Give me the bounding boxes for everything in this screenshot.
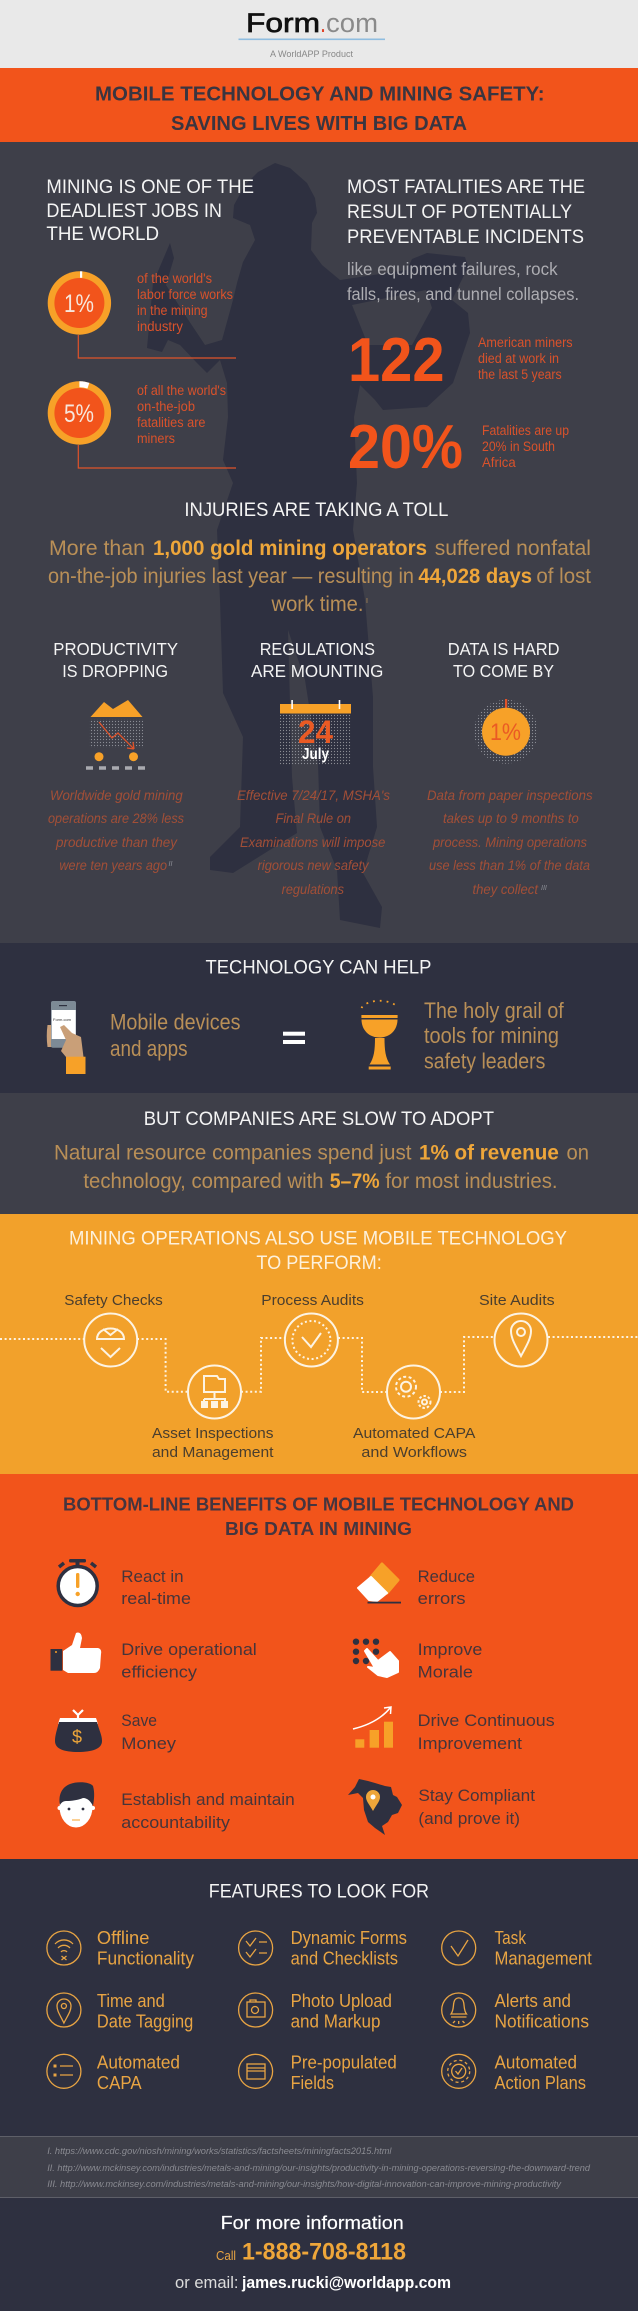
benefit: reduce errors	[358, 1564, 475, 1608]
panel: features to look for	[0, 1859, 638, 2311]
tagline: A WorldAPP Product	[270, 49, 353, 60]
text: adoption paragraph: Natural resource companies spend just	[54, 1141, 412, 1164]
panel: mobile technology uses	[0, 1214, 638, 1474]
heading: preventable incidents: PREVENTABLE INCIDENTS	[347, 227, 584, 248]
feature: automated action plans	[442, 2052, 586, 2093]
icon: hand holding phone	[47, 1001, 86, 1074]
feature: photo upload	[239, 1991, 392, 2031]
panel: bottom-line benefits: BIG DATA IN MINING	[225, 1518, 412, 1539]
panel: technology can help: TECHNOLOGY CAN HELP	[206, 958, 431, 979]
benefit: react in real-time: React in	[121, 1567, 184, 1586]
text: mobile devices	[110, 1009, 240, 1061]
feature: photo upload: and Markup	[291, 2011, 380, 2031]
text: fatalities: on-the-job	[137, 399, 195, 414]
text: injuries paragraph: I	[366, 598, 368, 605]
column: data	[427, 639, 593, 897]
text: data detail: Data from paper inspections	[427, 787, 593, 803]
heading: injuries: INJURIES ARE TAKING A TOLL	[184, 500, 448, 521]
text: injuries paragraph: More than	[49, 537, 145, 560]
sources band: I. https://www.cdc.gov/niosh/mining/works/statistics/factsheets/miningfacts2015.html	[47, 2146, 392, 2157]
stat: 122	[348, 326, 573, 395]
feature: task management: Management	[494, 1948, 592, 1968]
text: injuries paragraph: suffered nonfatal	[435, 537, 591, 560]
benefit: stay compliant	[348, 1779, 535, 1835]
text: holy grail: tools for mining	[424, 1023, 559, 1048]
text: data detail: III	[541, 885, 547, 892]
text: data detail: they collect	[472, 881, 539, 897]
feature: task management	[442, 1928, 592, 1968]
benefit: stay compliant: (and prove it)	[418, 1809, 520, 1828]
stat: 20%: 20% in South	[482, 439, 555, 454]
contact footer: For more information	[221, 2212, 404, 2233]
panel: technology can help	[0, 943, 638, 1093]
icon: calendar	[280, 700, 351, 765]
text: regulations detail: Final Rule on	[276, 810, 351, 826]
text: injuries paragraph: 44,028 days	[418, 565, 532, 588]
text: data detail: takes up to 9 months to	[443, 810, 579, 826]
step: site audits: Site Audits	[479, 1292, 555, 1309]
text: injuries paragraph: work time.	[271, 593, 364, 616]
text: holy grail: The holy grail of	[424, 998, 564, 1023]
benefit: operational efficiency: efficiency	[121, 1662, 198, 1681]
feature: dynamic forms: and Checklists	[291, 1948, 398, 1968]
feature: automated action plans: Automated	[494, 2052, 577, 2072]
text: holy grail	[424, 998, 564, 1074]
text: productivity detail: Worldwide gold mining	[50, 787, 183, 803]
column: productivity: IS DROPPING	[62, 661, 168, 681]
logo: Form.com: com	[326, 8, 378, 38]
benefit: continuous improvement: Improvement	[418, 1734, 522, 1753]
step: process audits: Process Audits	[261, 1292, 364, 1309]
step: automated CAPA: and Workflows	[361, 1444, 467, 1461]
column: regulations: REGULATIONS	[260, 639, 375, 659]
column: productivity	[48, 639, 184, 873]
contact footer: or email:	[175, 2273, 238, 2292]
stat: 20%: Africa	[482, 455, 516, 470]
icon: mine cart with falling chart	[86, 700, 146, 768]
sources band: III. http://www.mckinsey.com/industries/metals-and-mining/our-insights/how-digital-innovation-can-improve-mining-productivity	[47, 2179, 562, 2190]
column: regulations	[237, 639, 390, 897]
feature: pre-populated fields: Pre-populated	[291, 2052, 397, 2072]
benefit: operational efficiency: Drive operational	[121, 1640, 257, 1659]
text: regulations detail: regulations	[282, 881, 344, 897]
step: automated CAPA: Automated CAPA	[353, 1425, 475, 1442]
benefit: improve morale: Improve	[418, 1640, 482, 1659]
feature: pre-populated fields: Fields	[291, 2073, 334, 2093]
title banner: SAVING LIVES WITH BIG DATA	[171, 112, 467, 135]
logo: Form.com: Form	[246, 8, 320, 38]
panel: bottom-line benefits: BOTTOM-LINE BENEFITS OF MOBILE TECHNOLOGY AND	[63, 1494, 574, 1515]
benefit: save money: Save	[121, 1711, 157, 1730]
heading: preventable incidents: MOST FATALITIES ARE THE	[347, 177, 585, 198]
stat: 122: died at work in	[478, 351, 559, 366]
panel: bottom-line benefits	[0, 1474, 638, 1859]
text: adoption paragraph	[54, 1141, 589, 1193]
miner silhouette background	[147, 163, 470, 928]
text: data detail	[427, 787, 593, 897]
benefit: continuous improvement: Drive Continuous	[418, 1711, 555, 1730]
benefit: improve morale	[353, 1638, 482, 1681]
contact footer: Call	[216, 2248, 236, 2263]
donut: 5%	[48, 381, 236, 468]
feature: automated action plans: Action Plans	[494, 2073, 586, 2093]
contact footer	[175, 2212, 451, 2292]
text: productivity detail: operations are 28% less	[48, 810, 184, 826]
text: adoption paragraph: 5–7%	[330, 1170, 380, 1193]
panel: mobile technology uses: MINING OPERATIONS ALSO USE MOBILE TECHNOLOGY	[69, 1229, 567, 1250]
icon: equals sign	[283, 1032, 305, 1044]
benefit: reduce errors: Reduce	[418, 1567, 475, 1586]
feature: offline functionality: Functionality	[97, 1948, 194, 1968]
logo: Form.com	[238, 8, 385, 40]
column: data: DATA IS HARD	[448, 639, 560, 659]
stat: 122: American miners	[478, 335, 573, 350]
step: site audits	[479, 1292, 555, 1366]
text: regulations detail: Examinations will impose	[240, 834, 386, 850]
text: injuries paragraph: on-the-job injuries last year — resulting in	[48, 565, 414, 588]
text: labor force: of the world's	[137, 271, 212, 286]
donut: 1%: 1%	[64, 290, 94, 318]
panel: slow to adopt: BUT COMPANIES ARE SLOW TO ADOPT	[144, 1109, 494, 1130]
icon: holy grail	[361, 1001, 398, 1070]
benefit: operational efficiency	[50, 1633, 257, 1681]
text: productivity detail: II	[168, 861, 172, 868]
benefit: reduce errors: errors	[418, 1589, 466, 1608]
text: labor force: industry	[137, 319, 183, 334]
feature: offline functionality	[47, 1928, 194, 1968]
benefit: accountability	[58, 1782, 295, 1832]
text: regulations detail: rigorous new safety	[258, 857, 370, 873]
column: data: TO COME BY	[453, 661, 554, 681]
icon: calendar: 24	[298, 714, 333, 750]
text: regulations detail	[237, 787, 390, 897]
heading: deadliest jobs: MINING IS ONE OF THE	[46, 177, 254, 198]
feature: alerts: Alerts and	[494, 1991, 571, 2011]
benefit: accountability: accountability	[121, 1813, 231, 1832]
icon: 1% data drop: 1%	[490, 719, 521, 746]
donut: 1%	[48, 271, 236, 358]
feature: automated CAPA: CAPA	[97, 2073, 142, 2093]
title banner: MOBILE TECHNOLOGY AND MINING SAFETY:	[95, 83, 545, 106]
icon: hand holding phone: Form.com	[53, 1017, 72, 1022]
text: mobile devices: and apps	[110, 1036, 188, 1061]
text: incident types: falls, fires, and tunnel collapses.	[347, 284, 579, 304]
text: data detail: process. Mining operations	[432, 834, 587, 850]
benefit: react in real-time: real-time	[121, 1589, 191, 1608]
text: productivity detail: productive than they	[55, 834, 178, 850]
benefit: react in real-time	[58, 1559, 191, 1608]
text: incident types: like equipment failures, rock	[347, 259, 558, 279]
step: asset inspections: and Management	[152, 1444, 274, 1461]
feature: automated CAPA: Automated	[97, 2052, 180, 2072]
panel: mobile technology uses: TO PERFORM:	[256, 1253, 382, 1274]
stat: 20%: Fatalities are up	[482, 423, 569, 438]
feature: photo upload: Photo Upload	[291, 1991, 392, 2011]
stat: 122: 122	[348, 326, 444, 395]
feature: task management: Task	[494, 1928, 527, 1948]
text: incident types	[347, 259, 579, 304]
feature: time and date tagging: Date Tagging	[97, 2011, 193, 2031]
step: asset inspections	[152, 1366, 274, 1461]
text: adoption paragraph: for most industries.	[385, 1170, 558, 1193]
text: mobile devices: Mobile devices	[110, 1009, 240, 1034]
text: holy grail: safety leaders	[424, 1049, 545, 1074]
contact footer: james.rucki@worldapp.com	[241, 2273, 451, 2292]
text: fatalities: miners	[137, 431, 175, 446]
feature: time and date tagging	[47, 1991, 193, 2031]
feature: dynamic forms: Dynamic Forms	[291, 1928, 407, 1948]
step: automated CAPA	[353, 1366, 475, 1461]
icon: calendar: July	[302, 746, 329, 763]
donut: 5%: 5%	[64, 400, 94, 428]
panel: features to look for: FEATURES TO LOOK FOR	[209, 1882, 429, 1903]
text: labor force: in the mining	[137, 303, 208, 318]
feature: time and date tagging: Time and	[97, 1991, 165, 2011]
step: asset inspections: Asset Inspections	[152, 1425, 274, 1442]
heading: preventable incidents	[347, 177, 585, 248]
text: injuries paragraph	[48, 537, 591, 616]
text: adoption paragraph: 1% of revenue	[419, 1141, 559, 1164]
stat: 20%: 20%	[348, 413, 463, 482]
text: fatalities: fatalities are	[137, 415, 206, 430]
title banner	[0, 68, 638, 142]
benefit: save money: $	[72, 1727, 82, 1747]
text: regulations detail: Effective 7/24/17, MSHA's	[237, 787, 390, 803]
benefit: improve morale: Morale	[418, 1662, 473, 1681]
benefit: continuous improvement	[353, 1707, 555, 1753]
text: fatalities: of all the world's	[137, 383, 226, 398]
feature: offline functionality: Offline	[97, 1928, 149, 1948]
text: injuries paragraph: of lost	[536, 565, 591, 588]
benefit: save money	[55, 1710, 177, 1753]
feature: pre-populated fields	[239, 2052, 397, 2093]
text: adoption paragraph: on	[566, 1141, 589, 1164]
text: productivity detail: were ten years ago	[59, 857, 167, 873]
benefit: stay compliant: Stay Compliant	[418, 1786, 535, 1805]
contact footer: 1-888-708-8118	[242, 2238, 406, 2265]
panel: dark statistics section	[0, 142, 638, 943]
heading: deadliest jobs: THE WORLD	[46, 224, 159, 245]
stat: 122: the last 5 years	[478, 367, 562, 382]
sources band: II. http://www.mckinsey.com/industries/metals-and-mining/our-insights/productivity-in-mining-operations-reversing-the-downward-trend	[47, 2163, 591, 2174]
text: labor force: labor force works	[137, 287, 233, 302]
text: labor force	[137, 271, 233, 334]
header with logo	[0, 0, 638, 68]
step: process audits	[261, 1292, 364, 1366]
text: injuries paragraph: 1,000 gold mining operators	[153, 537, 427, 560]
stat: 20%	[348, 413, 569, 482]
feature: automated CAPA	[47, 2052, 180, 2093]
benefit: accountability: Establish and maintain	[121, 1790, 295, 1809]
text: data detail: use less than 1% of the data	[429, 857, 590, 873]
step: safety checks: Safety Checks	[64, 1292, 163, 1309]
column: regulations: ARE MOUNTING	[251, 661, 383, 681]
step: safety checks	[64, 1292, 163, 1366]
logo: Form.com: .	[320, 8, 326, 38]
text: adoption paragraph: technology, compared with	[83, 1170, 324, 1193]
sources band	[0, 2136, 638, 2198]
heading: deadliest jobs	[46, 177, 254, 245]
feature: alerts	[442, 1991, 589, 2031]
dotted process path	[0, 1337, 638, 1392]
text: productivity detail	[48, 787, 184, 873]
heading: deadliest jobs: DEADLIEST JOBS IN	[46, 201, 222, 222]
icon: 1% data drop	[474, 699, 538, 764]
column: productivity: PRODUCTIVITY	[53, 639, 178, 659]
text: fatalities	[137, 383, 226, 446]
heading: preventable incidents: RESULT OF POTENTIALLY	[347, 202, 572, 223]
benefit: save money: Money	[121, 1734, 177, 1753]
feature: dynamic forms	[239, 1928, 407, 1968]
feature: alerts: Notifications	[494, 2011, 589, 2031]
panel: slow to adopt	[0, 1093, 638, 1214]
